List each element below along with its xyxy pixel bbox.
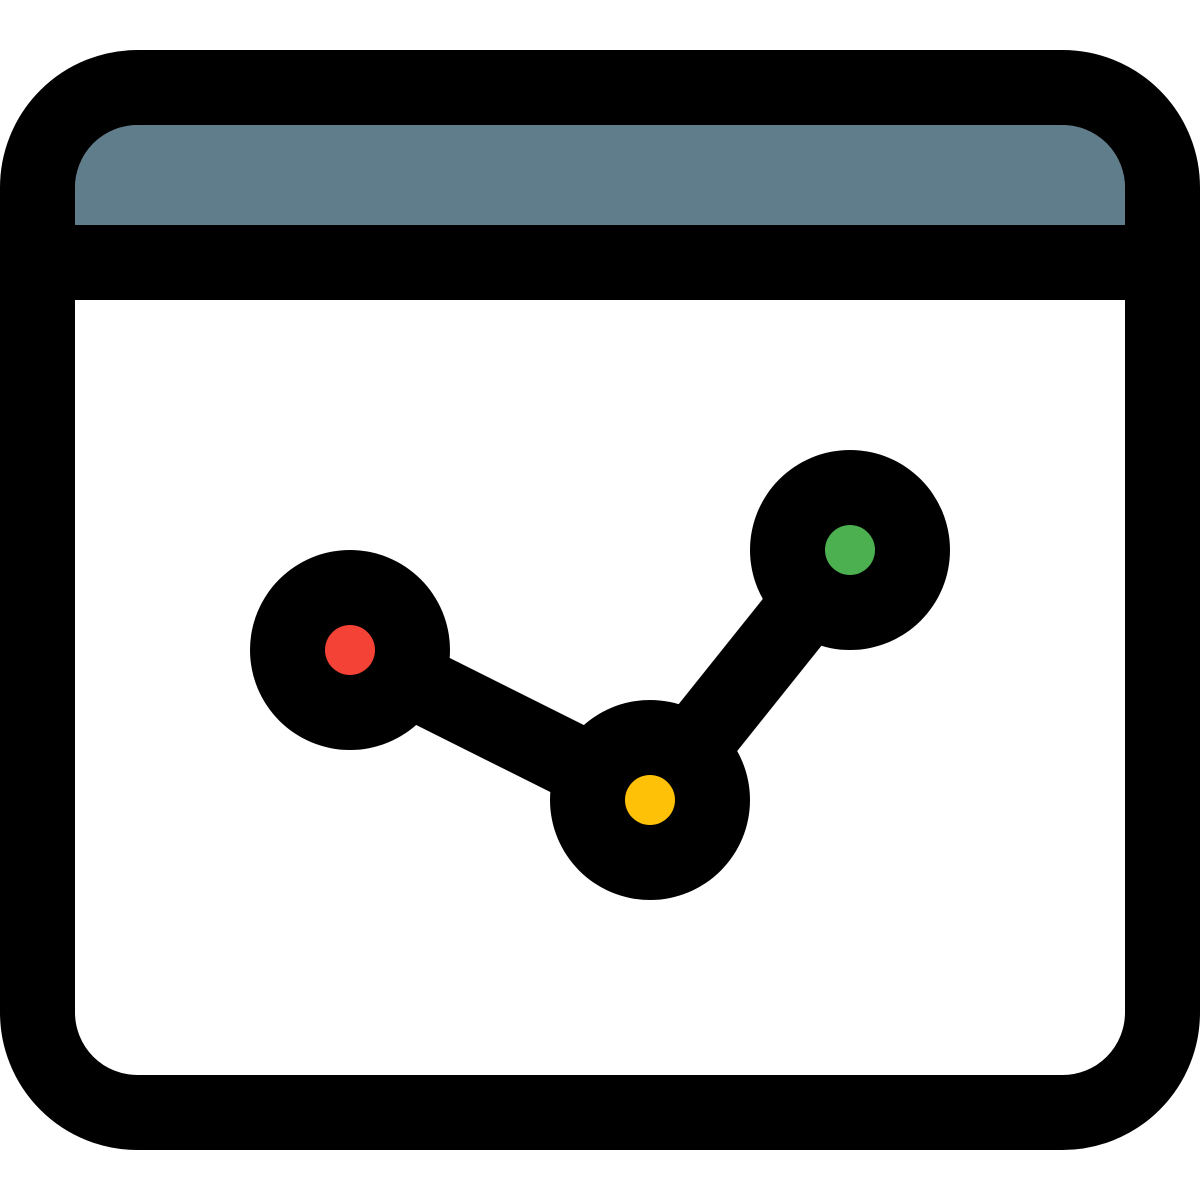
chart: line graph — [250, 450, 950, 900]
window header bar — [75, 125, 1125, 225]
header divider — [37, 225, 1163, 300]
data point: yellow — [550, 700, 750, 900]
data point: green — [750, 450, 950, 650]
data point: red — [250, 550, 450, 750]
chart lines — [350, 550, 850, 800]
